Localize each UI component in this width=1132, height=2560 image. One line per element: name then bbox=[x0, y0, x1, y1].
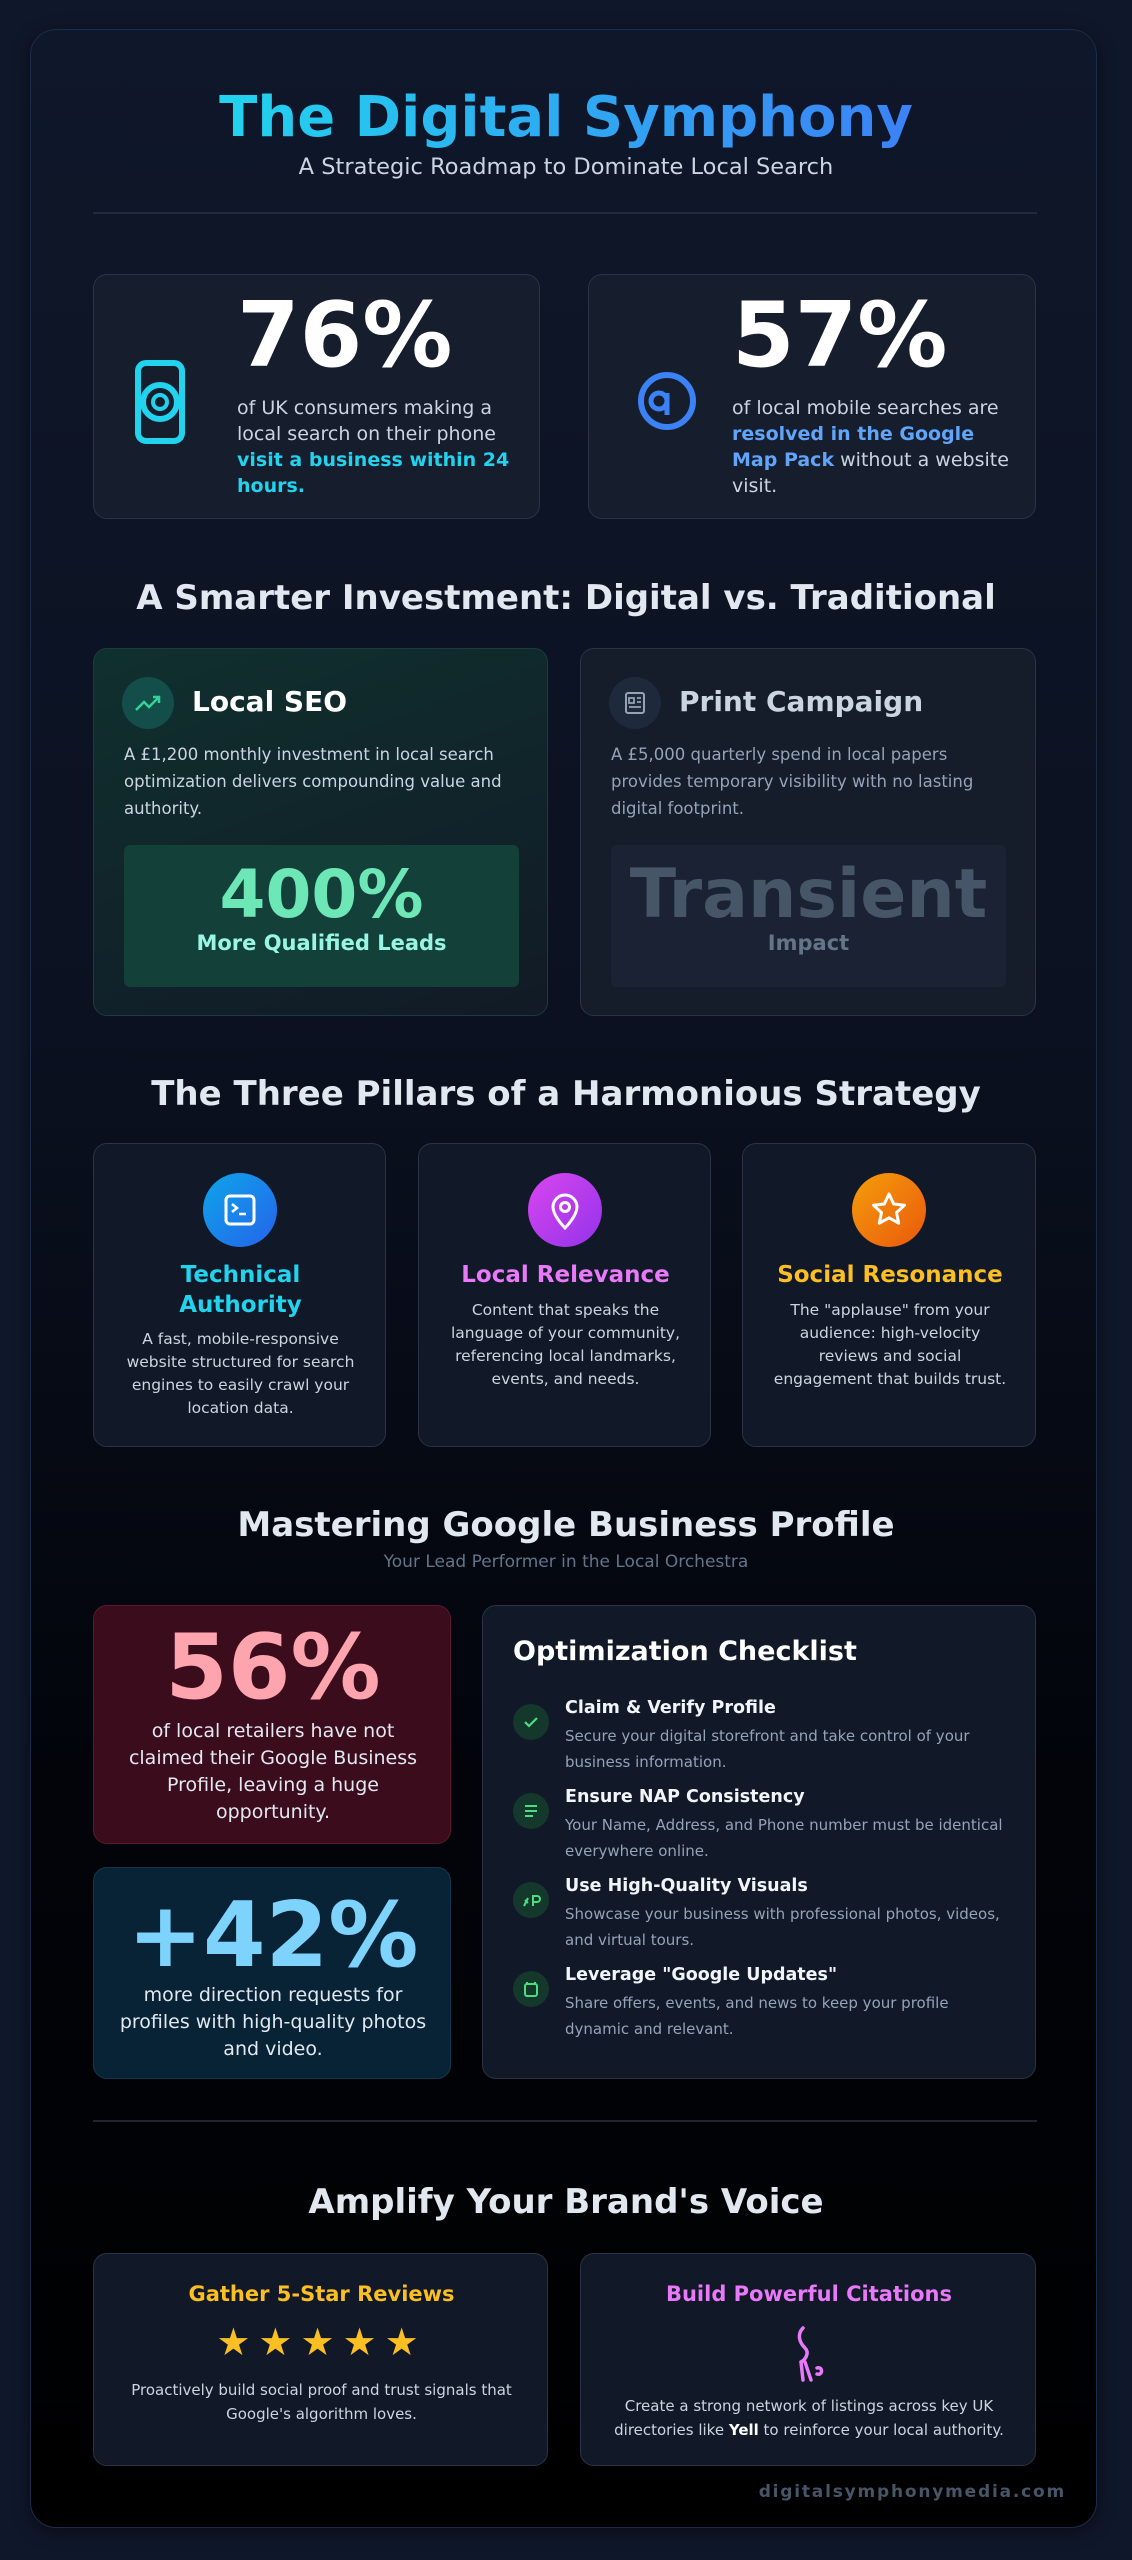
heading: three pillars: The Three Pillars of a Harmonious Strategy bbox=[151, 1074, 981, 1114]
icon: citation bbox=[798, 2326, 824, 2382]
stat card: 57% bbox=[588, 274, 1036, 519]
metric: transient: Transient bbox=[630, 855, 987, 934]
subheading: Your Lead Performer in the Local Orchestra bbox=[384, 1552, 748, 1572]
icon: phone bbox=[135, 360, 185, 444]
subtitle: A Strategic Roadmap to Dominate Local Search bbox=[299, 154, 833, 180]
title: The Digital Symphony bbox=[219, 85, 913, 150]
stat card: +42% bbox=[93, 1867, 451, 2079]
icon: trend bbox=[122, 677, 174, 729]
icon: stars: ★★★★★ bbox=[216, 2320, 427, 2364]
pillar text: Content that speaks the language of your community, referencing local landmarks, events, and needs. bbox=[451, 1301, 680, 1388]
icon: pin bbox=[528, 1173, 602, 1247]
footer: digitalsymphonymedia.com bbox=[759, 2482, 1066, 2502]
pillar text: reviews and social bbox=[819, 1347, 961, 1365]
heading: smarter investment: A Smarter Investment: Digital vs. Traditional bbox=[136, 578, 996, 618]
item: NAP bbox=[513, 1787, 1003, 1860]
pillar: social resonance bbox=[742, 1143, 1036, 1447]
stat text: more direction requests for profiles with high-quality photos and video. bbox=[120, 1984, 426, 2060]
stat number: +42% bbox=[128, 1883, 418, 1988]
item: claim bbox=[513, 1698, 970, 1771]
metric: transient: Impact bbox=[768, 931, 849, 955]
item: visuals bbox=[513, 1876, 1000, 1949]
stat text: of local mobile searches are resolved in the Google Map Pack without a website visit. bbox=[732, 397, 1009, 497]
pillar title: Social Resonance bbox=[777, 1262, 1003, 1288]
icon: terminal bbox=[203, 1173, 277, 1247]
card: reviews bbox=[93, 2253, 548, 2466]
heading: amplify: Amplify Your Brand's Voice bbox=[308, 2182, 824, 2222]
metric: transient bbox=[611, 845, 1006, 987]
pillar text: A fast, mobile-responsive website structured for search engines to easily crawl your location data. bbox=[127, 1330, 354, 1417]
stat card: 56% bbox=[93, 1605, 451, 1844]
item: NAP: Ensure NAP Consistency bbox=[565, 1787, 805, 1807]
metric: 400%: More Qualified Leads bbox=[196, 931, 447, 955]
metric: 400%: 400% bbox=[220, 856, 423, 933]
checklist title: Optimization Checklist bbox=[513, 1636, 857, 1667]
item: NAP: Your Name, Address, and Phone number must be identical everywhere online. bbox=[565, 1816, 1003, 1860]
stat text: of local retailers have not claimed their Google Business Profile, leaving a huge opportunity. bbox=[129, 1720, 417, 1823]
pillar text: engagement that builds trust. bbox=[774, 1370, 1006, 1388]
icon: search bbox=[638, 372, 696, 430]
item: updates bbox=[513, 1965, 949, 2038]
item: visuals: Use High-Quality Visuals bbox=[565, 1876, 808, 1896]
stat number: 76% bbox=[237, 283, 452, 388]
card: citations bbox=[580, 2253, 1036, 2466]
card: Print Campaign bbox=[580, 648, 1036, 1016]
item: visuals: Showcase your business with professional photos, videos, and virtual tours. bbox=[565, 1905, 1000, 1949]
pillar title: Local Relevance bbox=[461, 1262, 670, 1288]
card title: Build Powerful Citations bbox=[666, 2282, 952, 2306]
stat number: 56% bbox=[165, 1615, 381, 1720]
card title: Print Campaign bbox=[679, 685, 923, 718]
stat card: 76% bbox=[93, 274, 540, 519]
card text: A £1,200 monthly investment in local search optimization delivers compounding value and authority. bbox=[124, 745, 502, 818]
card title: Local SEO bbox=[192, 685, 347, 718]
item: updates: Leverage "Google Updates" bbox=[565, 1965, 837, 1985]
stat text: of UK consumers making a local search on their phone visit a business within 24 hours. bbox=[237, 397, 509, 497]
heading: google business profile: Mastering Google Business Profile bbox=[237, 1505, 895, 1545]
pillar: technical authority bbox=[93, 1143, 386, 1447]
icon: newspaper bbox=[609, 677, 661, 729]
stat number: 57% bbox=[732, 283, 947, 388]
item: claim: Claim & Verify Profile bbox=[565, 1698, 776, 1718]
card text: Create a strong network of listings across key UK directories like Yell to reinforce your local authority. bbox=[614, 2397, 1004, 2439]
card title: Gather 5-Star Reviews bbox=[188, 2282, 455, 2306]
item: updates: Share offers, events, and news to keep your profile dynamic and relevant. bbox=[565, 1994, 949, 2038]
metric: 400% bbox=[124, 845, 519, 987]
card text: Proactively build social proof and trust signals that Google's algorithm loves. bbox=[131, 2381, 512, 2423]
pillar: local relevance bbox=[418, 1143, 711, 1447]
card: Local SEO bbox=[93, 648, 548, 1016]
pillar text: The "applause" from your audience: high-velocity bbox=[790, 1301, 990, 1342]
pillar text bbox=[774, 1301, 1006, 1388]
pillar title: Technical Authority bbox=[179, 1262, 302, 1318]
item: claim: Secure your digital storefront and take control of your business information. bbox=[565, 1727, 970, 1771]
icon: star bbox=[852, 1173, 926, 1247]
checklist panel bbox=[482, 1605, 1036, 2079]
card text: A £5,000 quarterly spend in local papers provides temporary visibility with no lasting digital footprint. bbox=[611, 745, 973, 818]
